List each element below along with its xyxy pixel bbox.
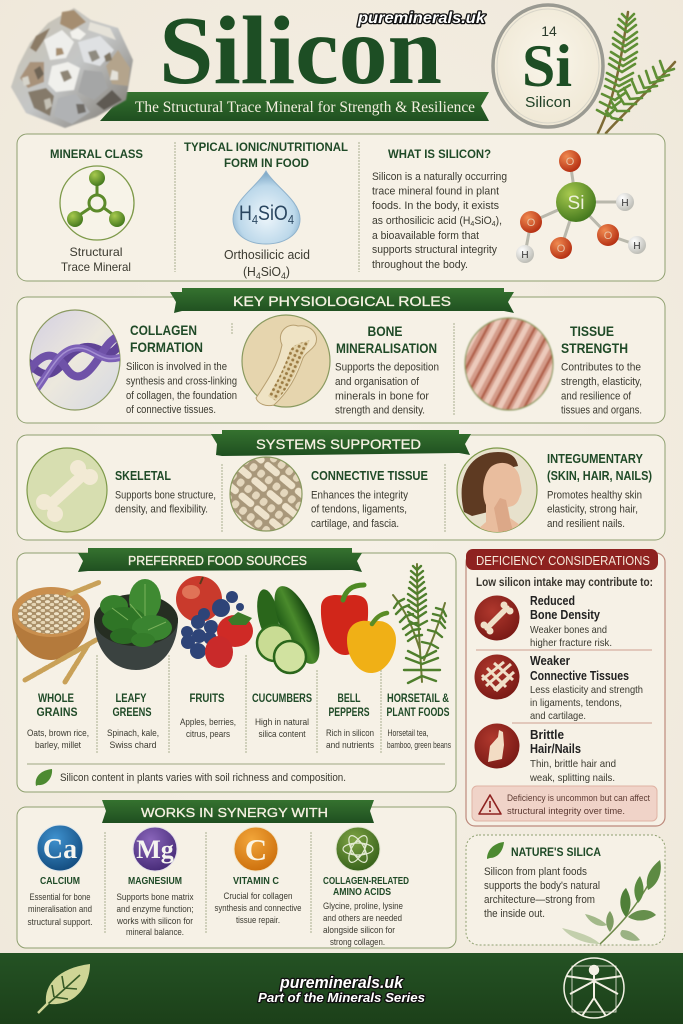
system: connective tissue: Enhances the integrity <box>311 490 409 502</box>
icon: leaf <box>487 842 504 859</box>
role: collagen formation: FORMATION <box>130 339 203 355</box>
ionic form column: 4 <box>288 212 294 227</box>
role: bone mineralisation: MINERALISATION <box>336 340 437 356</box>
deficiency header <box>466 549 658 570</box>
food labels: GREENS <box>112 707 152 719</box>
deficiency item: connective tissues <box>474 654 643 722</box>
food labels: PLANT FOODS <box>386 707 450 719</box>
ionic form column: 4 <box>252 212 258 227</box>
icon: footer leaf <box>38 964 90 1013</box>
header: site watermark: pureminerals.uk <box>357 10 486 27</box>
header: subtitle ribbon <box>100 92 489 121</box>
role: bone mineralisation <box>242 315 439 416</box>
system: connective tissue <box>230 457 428 531</box>
synergy: vitamin C: VITAMIN C <box>233 875 279 887</box>
role: tissue strength <box>465 318 642 416</box>
deficiency item: bone density: Bone Density <box>530 608 600 622</box>
header: title Silicon: Silicon <box>159 0 442 105</box>
food labels: Rich in silicon <box>326 728 374 739</box>
system: integumentary portrait <box>457 448 652 536</box>
icon: orthosilicic acid molecule: Si <box>568 193 584 214</box>
food labels: Swiss chard <box>110 740 156 751</box>
food labels: LEAFY <box>116 693 147 705</box>
role: tissue strength: strength, elasticity, <box>561 376 642 388</box>
role: bone mineralisation: BONE <box>368 323 402 339</box>
deficiency item: connective tissues: Less elasticity and strength <box>530 684 643 696</box>
header: periodic element badge: 14 <box>541 23 557 39</box>
food labels: HORSETAIL & <box>387 693 449 705</box>
synergy: vitamin C: tissue repair. <box>236 915 280 926</box>
mineral class column: Trace Mineral <box>61 260 131 274</box>
synergy: vitamin C <box>214 827 302 926</box>
footer band <box>0 953 683 1024</box>
food labels: Apples, berries, <box>180 717 236 728</box>
deficiency warning note: structural integrity over time. <box>507 806 625 817</box>
header: periodic element badge <box>493 5 603 127</box>
synergy: calcium: CALCIUM <box>40 875 80 887</box>
icon: orthosilicic acid molecule: O <box>527 217 536 229</box>
deficiency header: DEFICIENCY CONSIDERATIONS <box>476 553 650 568</box>
what is silicon text block: a bioavailable form that <box>372 230 479 242</box>
deficiency item: brittle hair and nails <box>474 724 616 784</box>
food note <box>36 769 346 786</box>
ionic form column: 4 <box>281 271 286 281</box>
synergy: vitamin C: C <box>245 832 267 867</box>
nature's silica text: architecture—strong from <box>484 894 595 906</box>
role: tissue strength: tissues and organs. <box>561 404 642 416</box>
system: integumentary portrait: elasticity, strong hair, <box>547 504 638 516</box>
food labels: GRAINS <box>36 707 78 719</box>
header: mineral rock <box>11 8 133 128</box>
food: leafy greens illustration <box>94 579 178 670</box>
ionic form column: H <box>239 202 254 225</box>
role: collagen formation: synthesis and cross-linking <box>126 376 237 388</box>
mineral class column: Structural <box>70 245 122 259</box>
header: subtitle ribbon: The Structural Trace Mineral for Strength & Resilience <box>135 99 475 116</box>
synergy: magnesium: and enzyme function; <box>116 904 194 915</box>
role: collagen formation <box>28 310 237 416</box>
icon: orthosilicic acid molecule: H <box>621 198 629 209</box>
mineral class column: MINERAL CLASS <box>50 147 143 161</box>
food: whole grains illustration <box>12 582 100 682</box>
food labels: and nutrients <box>326 740 374 751</box>
system: skeletal <box>27 448 216 532</box>
what is silicon text block: as orthosilicic acid (H <box>372 215 476 227</box>
banner heading: WORKS IN SYNERGY WITH <box>141 805 328 820</box>
what is silicon text block: Silicon is a naturally occurring <box>372 171 507 183</box>
panel: works in synergy with <box>17 800 456 948</box>
icon: vitruvian figure <box>564 958 624 1018</box>
food labels: Oats, brown rice, <box>27 728 89 739</box>
icon: orthosilicic acid molecule: H <box>521 250 529 261</box>
what is silicon text block: SiO <box>474 215 492 227</box>
deficiency item: brittle hair and nails: weak, splitting nails. <box>529 772 615 784</box>
food labels: WHOLE <box>38 693 74 705</box>
deficiency item: connective tissues: and cartilage. <box>530 710 586 722</box>
synergy: calcium: mineralisation and <box>28 904 92 915</box>
deficiency item: brittle hair and nails: Thin, brittle hair and <box>530 758 616 770</box>
food labels: silica content <box>258 729 306 740</box>
header: horsetail sprig <box>597 12 675 133</box>
system: integumentary portrait: (SKIN, HAIR, NAILS) <box>547 469 652 483</box>
system: integumentary portrait: and resilient nails. <box>547 518 625 530</box>
panel: mineral overview <box>17 134 665 281</box>
icon: orthosilicic acid molecule: H <box>633 241 641 252</box>
synergy: collagen-related amino acids: and others are needed <box>323 913 402 924</box>
food: bell peppers illustration <box>321 585 396 673</box>
banner heading <box>211 430 471 456</box>
synergy: magnesium: MAGNESIUM <box>128 875 182 887</box>
system: skeletal: Supports bone structure, <box>115 490 216 502</box>
ionic form column: SiO <box>258 202 288 225</box>
role: bone mineralisation: Supports the deposition <box>335 362 439 374</box>
food labels: citrus, pears <box>186 729 230 740</box>
food labels: FRUITS <box>190 693 225 705</box>
deficiency warning note <box>472 786 657 821</box>
deficiency item: bone density: higher fracture risk. <box>530 637 612 649</box>
system: connective tissue: CONNECTIVE TISSUE <box>311 469 428 483</box>
food labels: Spinach, kale, <box>107 728 159 739</box>
food labels: CUCUMBERS <box>252 693 312 705</box>
synergy: collagen-related amino acids <box>323 827 409 948</box>
food labels: Horsetail tea, <box>388 728 428 739</box>
banner heading <box>78 548 362 572</box>
panel: nature's silica: NATURE'S SILICA <box>511 845 601 859</box>
ionic form column: SiO <box>261 265 281 279</box>
what is silicon text block: ), <box>496 215 502 227</box>
header: periodic element badge: Silicon <box>525 94 571 111</box>
synergy: calcium <box>28 825 92 928</box>
ionic form column: 4 <box>256 271 261 281</box>
role: collagen formation: of collagen, the foundation <box>126 390 237 402</box>
food labels: bamboo, green beans <box>387 740 451 751</box>
what is silicon text block: throughout the body. <box>372 259 468 271</box>
nature's silica text: supports the body's natural <box>484 880 600 892</box>
synergy: calcium: Ca <box>43 834 77 865</box>
panel: systems supported <box>17 430 665 540</box>
deficiency item: bone density: Reduced <box>530 594 575 608</box>
nature's silica text: Silicon from plant foods <box>484 866 587 878</box>
icon: orthosilicic acid molecule: O <box>566 156 575 168</box>
ionic form column: ) <box>286 265 290 279</box>
role: tissue strength: TISSUE <box>570 323 614 339</box>
synergy: magnesium: Mg <box>136 835 174 864</box>
what is silicon text block: trace mineral found in plant <box>372 186 499 198</box>
system: connective tissue: cartilage, and fascia. <box>311 518 399 530</box>
ionic form column: (H <box>243 265 256 279</box>
deficiency item: bone density <box>474 594 612 649</box>
what is silicon text block: WHAT IS SILICON? <box>388 147 491 161</box>
synergy: collagen-related amino acids: COLLAGEN-RELATED <box>323 875 409 887</box>
synergy: magnesium: mineral balance. <box>126 927 184 938</box>
role: tissue strength: STRENGTH <box>561 340 628 356</box>
panel: preferred food sources <box>12 548 456 792</box>
role: collagen formation: of connective tissues. <box>126 404 216 416</box>
header: periodic element badge: Si <box>522 33 572 99</box>
deficiency item: brittle hair and nails: Brittle <box>530 728 564 742</box>
food note: Silicon content in plants varies with soil richness and composition. <box>60 772 346 784</box>
decorative branch <box>562 860 661 944</box>
footer series line: Part of the Minerals Series <box>258 991 425 1005</box>
role: bone mineralisation: and organisation of <box>335 376 420 388</box>
panel: deficiency considerations: Low silicon intake may contribute to: <box>476 577 653 589</box>
food: horsetail illustration <box>393 564 446 683</box>
what is silicon text block <box>372 147 507 271</box>
role: collagen formation: COLLAGEN <box>130 322 197 338</box>
deficiency item: connective tissues: Weaker <box>530 654 570 668</box>
system: integumentary portrait: INTEGUMENTARY <box>547 452 644 466</box>
synergy: calcium: structural support. <box>28 917 92 928</box>
synergy: vitamin C: Crucial for collagen <box>224 891 292 902</box>
food labels: BELL <box>338 693 360 705</box>
role: bone mineralisation: strength and density. <box>335 404 425 416</box>
ionic form column: FORM IN FOOD <box>224 156 309 170</box>
synergy: collagen-related amino acids: AMINO ACIDS <box>333 886 391 898</box>
synergy: vitamin C: synthesis and connective <box>214 903 302 914</box>
ionic form column: TYPICAL IONIC/NUTRITIONAL <box>184 140 348 154</box>
synergy: calcium: Essential for bone <box>30 892 90 903</box>
role: bone mineralisation: minerals in bone for <box>335 390 429 402</box>
banner heading: SYSTEMS SUPPORTED <box>256 436 421 452</box>
deficiency item: bone density: Weaker bones and <box>530 624 607 636</box>
icon: orthosilicic acid molecule: O <box>557 243 566 255</box>
food labels <box>27 693 451 751</box>
what is silicon text block: foods. In the body, it exists <box>372 200 499 212</box>
mineral class column <box>50 147 143 274</box>
deficiency item: brittle hair and nails: Hair/Nails <box>530 742 581 756</box>
what is silicon text block: supports structural integrity <box>372 244 497 256</box>
panel: nature's silica <box>466 835 665 945</box>
ionic form column: Orthosilicic acid <box>224 248 310 262</box>
icon: orthosilicic acid molecule <box>516 150 646 263</box>
panel: key physiological roles <box>17 288 665 423</box>
what is silicon text block: 4 <box>470 219 474 228</box>
deficiency item: connective tissues: in ligaments, tendons, <box>530 697 622 709</box>
nature's silica text <box>484 866 600 920</box>
icon: orthosilicic acid molecule: O <box>604 230 613 242</box>
system: skeletal: density, and flexibility. <box>115 504 208 516</box>
synergy: magnesium: Supports bone matrix <box>116 892 194 903</box>
banner heading <box>170 288 514 313</box>
role: tissue strength: and resilience of <box>561 390 632 402</box>
footer site name: pureminerals.uk <box>279 973 404 992</box>
synergy: collagen-related amino acids: strong collagen. <box>330 937 385 948</box>
role: tissue strength: Contributes to the <box>561 362 641 374</box>
food labels: High in natural <box>255 717 309 728</box>
banner heading: KEY PHYSIOLOGICAL ROLES <box>233 293 451 309</box>
synergy: magnesium: works with silicon for <box>116 916 193 927</box>
food labels: PEPPERS <box>328 707 370 719</box>
food: cucumbers illustration <box>254 580 329 673</box>
deficiency item: connective tissues: Connective Tissues <box>530 669 629 683</box>
synergy: collagen-related amino acids: Glycine, proline, lysine <box>323 901 403 912</box>
food labels: barley, millet <box>35 740 81 751</box>
ionic form column <box>184 140 348 281</box>
deficiency warning note: Deficiency is uncommon but can affect <box>507 793 650 804</box>
role: collagen formation: Silicon is involved in the <box>126 361 227 373</box>
panel: deficiency considerations <box>466 549 665 826</box>
synergy: collagen-related amino acids: alongside silicon for <box>323 925 395 936</box>
what is silicon text block: 4 <box>492 219 496 228</box>
banner heading <box>102 800 374 823</box>
system: skeletal: SKELETAL <box>115 469 171 483</box>
system: connective tissue: of tendons, ligaments, <box>311 504 407 516</box>
system: integumentary portrait: Promotes healthy skin <box>547 490 642 502</box>
synergy: magnesium <box>116 827 194 938</box>
banner heading: PREFERRED FOOD SOURCES <box>128 553 307 568</box>
nature's silica text: the inside out. <box>484 908 545 920</box>
food: fruits illustration <box>176 576 253 668</box>
